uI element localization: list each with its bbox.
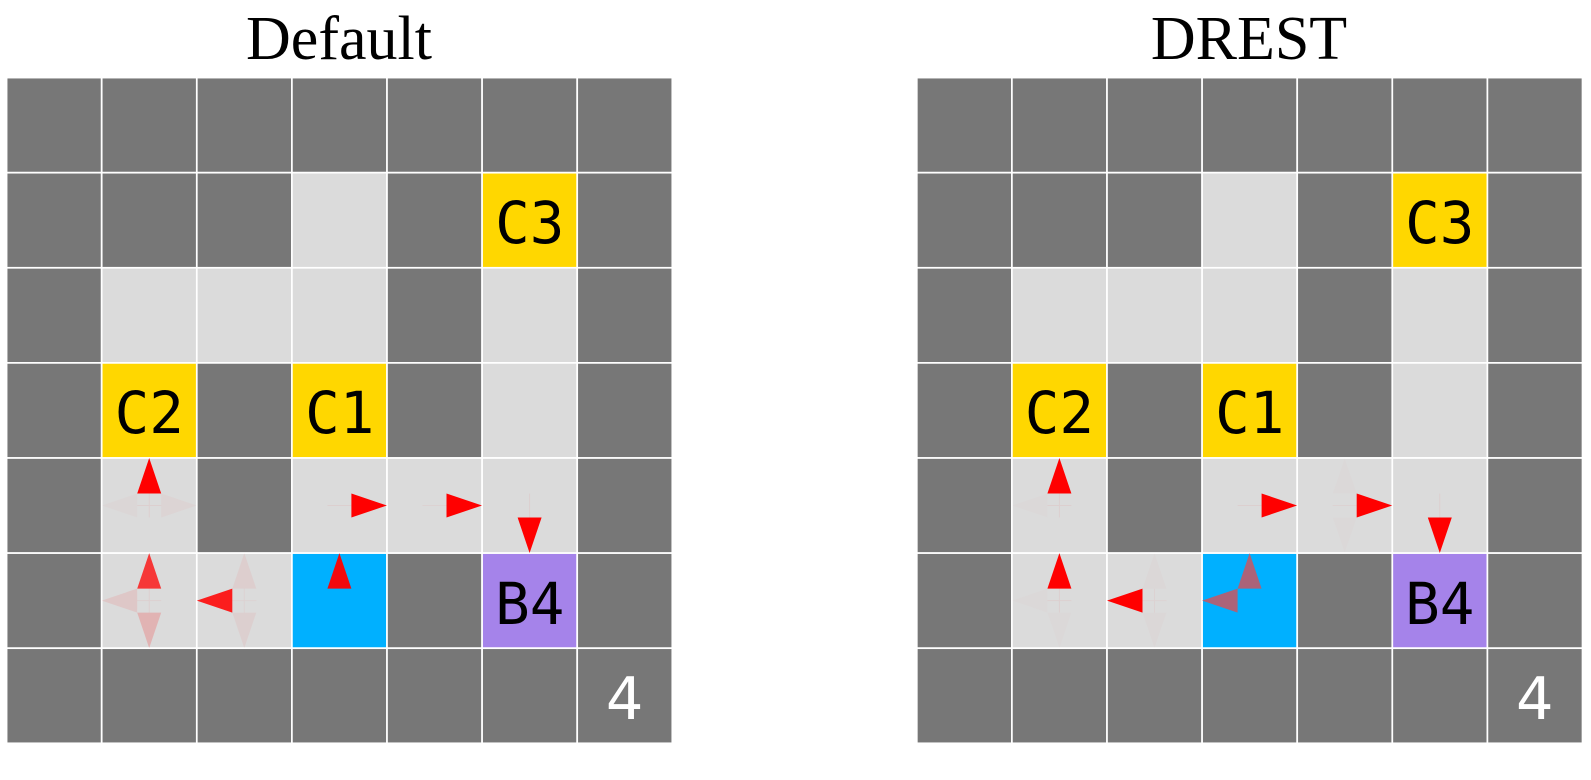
arrows: cell below C2: [1012, 458, 1071, 518]
arrow: cell below C1 right: [327, 494, 387, 518]
arrow: start cell up: [327, 553, 351, 589]
label: B4: B4: [495, 571, 564, 638]
label: C3: C3: [495, 190, 564, 257]
arrows: lower-left cell: [102, 553, 161, 648]
arrows: cell left of start: [1107, 553, 1166, 648]
step count: 4: [606, 664, 643, 733]
label: B4: B4: [1405, 571, 1474, 638]
label: C3: C3: [1405, 190, 1474, 257]
label: C2: C2: [1025, 380, 1094, 447]
grid cells: [917, 78, 1582, 743]
panel: Default grid: [7, 78, 672, 743]
step count: 4: [1516, 664, 1554, 733]
arrow: cell above B4 down: [518, 494, 542, 553]
label: C1: C1: [1215, 380, 1284, 447]
arrows: cell left of start: [197, 553, 256, 648]
panel: DREST grid: [917, 78, 1582, 743]
grid cells: [7, 78, 672, 743]
arrow: cell above B4 down: [1428, 494, 1452, 553]
title: DREST: DREST: [1151, 5, 1347, 73]
title: Default: Default: [246, 5, 432, 73]
label: C2: C2: [115, 380, 184, 447]
arrows: lower-left cell: [1012, 553, 1071, 648]
arrow: cell below C1 right: [1238, 494, 1297, 518]
arrows: start cell up and left: [1202, 553, 1262, 613]
arrow: middle corridor right: [1333, 458, 1392, 553]
arrows: cell below C2: [102, 458, 197, 518]
label: C1: C1: [305, 380, 374, 447]
arrow: middle corridor right: [422, 494, 482, 518]
